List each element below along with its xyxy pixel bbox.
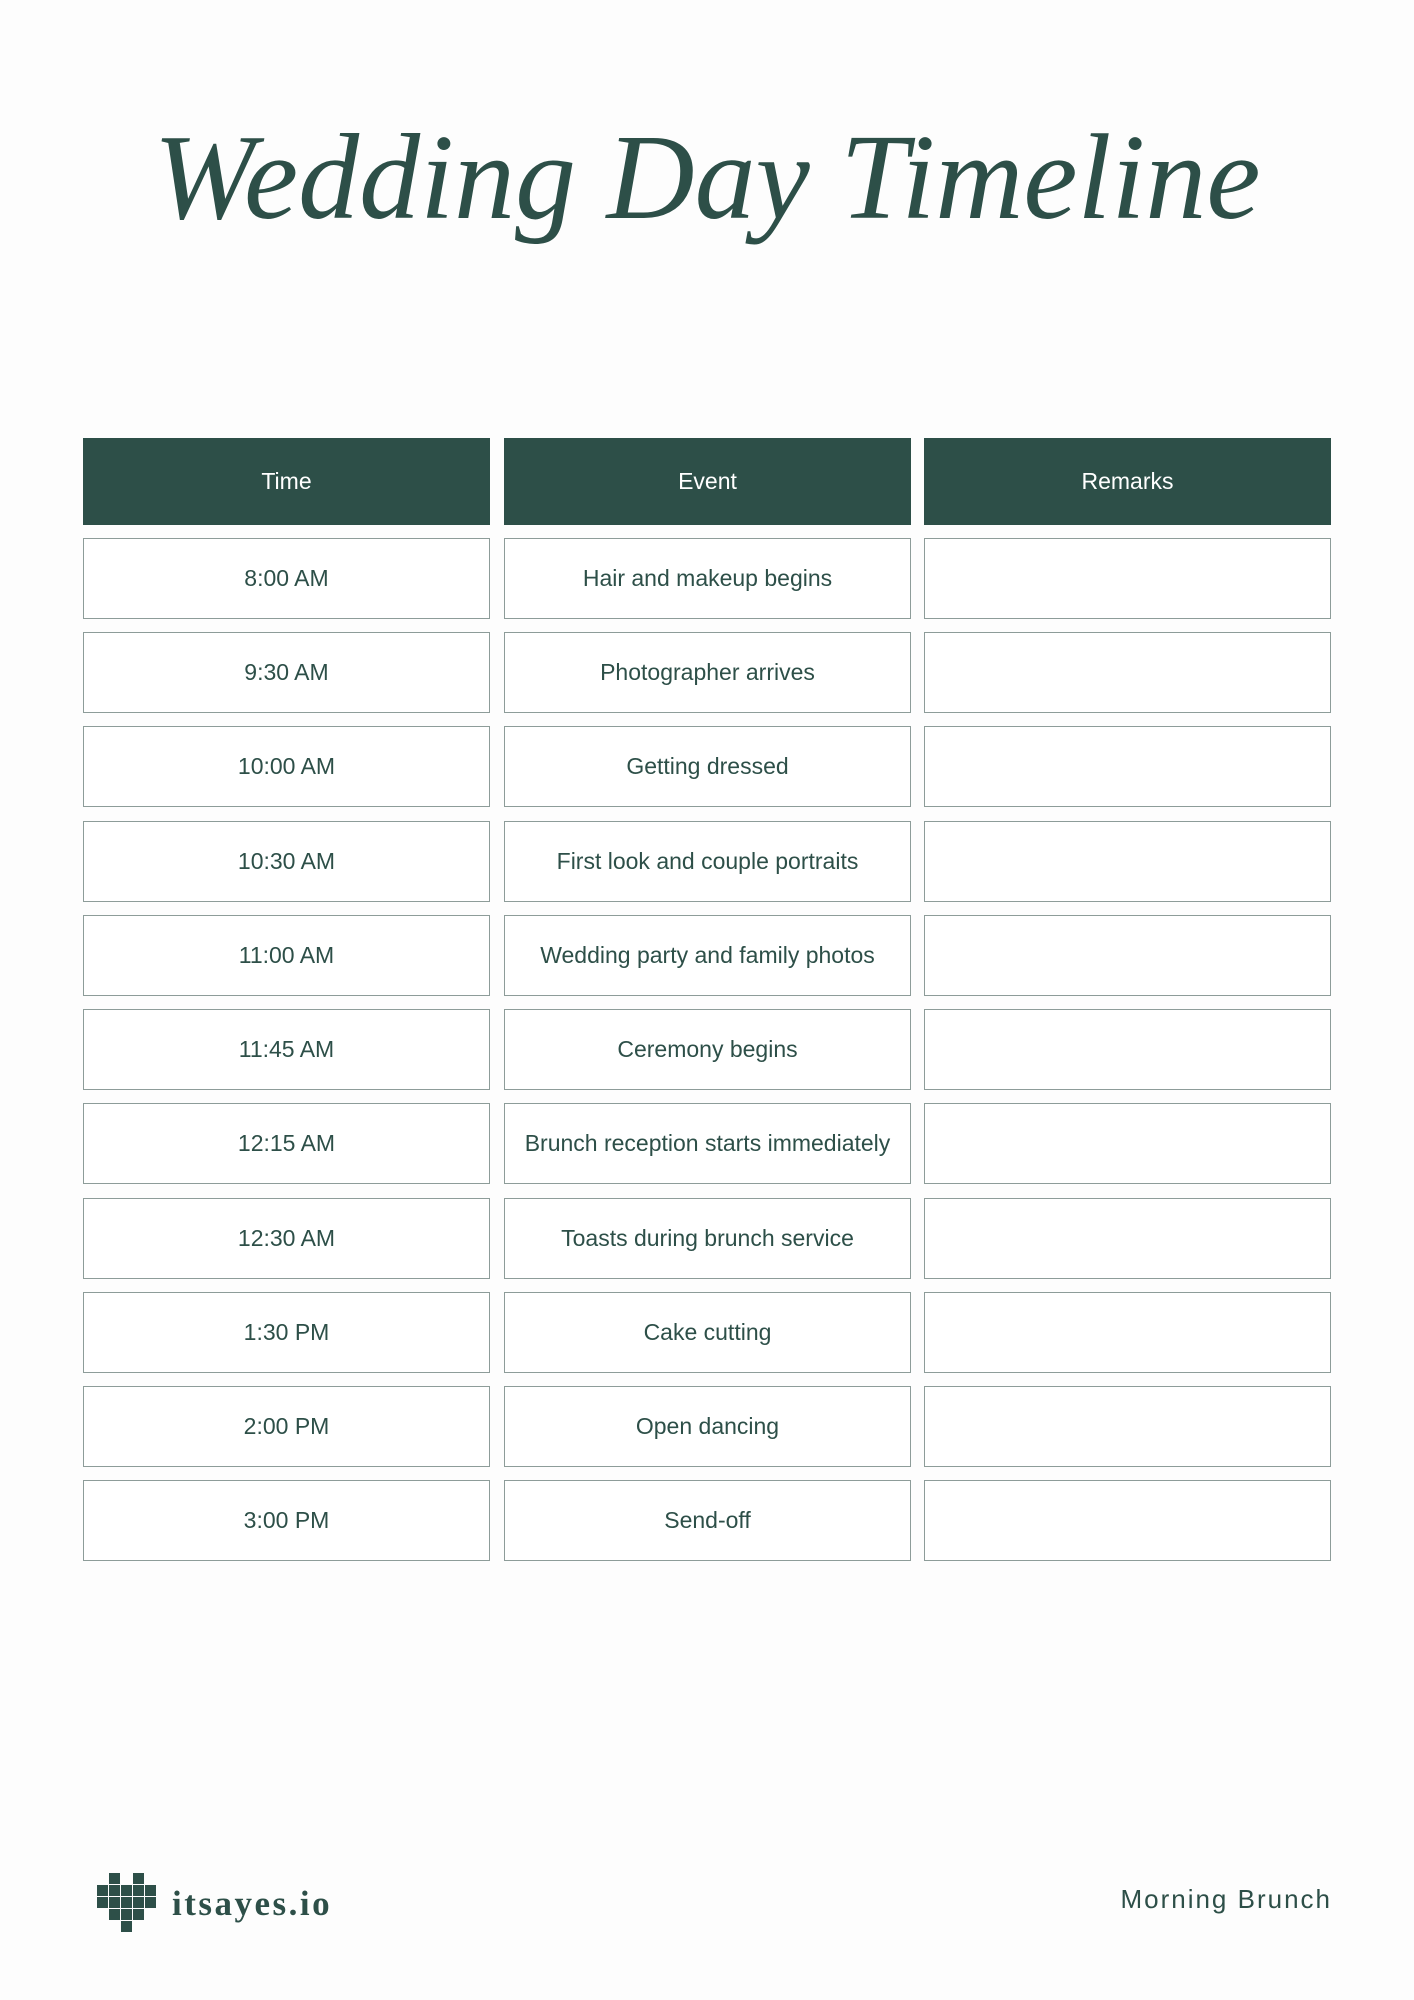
logo: [97, 1873, 332, 1932]
row 1: 8:00 AM: [244, 565, 329, 591]
row 1: [83, 538, 1331, 619]
row 8: [83, 1198, 1331, 1279]
icon: pixel heart: [97, 1873, 156, 1932]
header: Remarks: Remarks: [1081, 468, 1174, 494]
row 3: Getting dressed: [626, 753, 789, 779]
row 4: [83, 821, 1331, 902]
logo text: itsayes.io: [172, 1884, 332, 1923]
row 10: Open dancing: [636, 1413, 779, 1439]
header: Event: [504, 438, 911, 525]
row 5: 11:00 AM: [239, 942, 334, 968]
row 7: [83, 1103, 1331, 1184]
footer label: Morning Brunch: [1120, 1884, 1332, 1914]
row 9: [83, 1292, 1331, 1373]
row 3: [83, 726, 1331, 807]
row 4: First look and couple portraits: [557, 848, 858, 874]
header: Time: Time: [261, 468, 312, 494]
row 8: 12:30 AM: [238, 1225, 335, 1251]
row 7: Brunch reception starts immediately: [525, 1130, 890, 1156]
row 6: 11:45 AM: [239, 1036, 334, 1062]
header: Event: Event: [678, 468, 737, 494]
title: Wedding Day Timeline: [154, 110, 1260, 245]
row 9: Cake cutting: [644, 1319, 771, 1345]
row 2: 9:30 AM: [244, 659, 329, 685]
row 1: Hair and makeup begins: [583, 565, 832, 591]
row 2: Photographer arrives: [600, 659, 815, 685]
row 9: 1:30 PM: [244, 1319, 329, 1345]
row 11: 3:00 PM: [244, 1507, 329, 1533]
row 11: [83, 1480, 1331, 1561]
row 5: [83, 915, 1331, 996]
row 11: Send-off: [664, 1507, 751, 1533]
row 5: Wedding party and family photos: [540, 942, 875, 968]
row 6: Ceremony begins: [617, 1036, 798, 1062]
row 7: 12:15 AM: [238, 1130, 335, 1156]
row 3: 10:00 AM: [238, 753, 335, 779]
row 10: 2:00 PM: [244, 1413, 329, 1439]
row 4: 10:30 AM: [238, 848, 335, 874]
row 2: [83, 632, 1331, 713]
header: Remarks: [924, 438, 1331, 525]
header: Time: [83, 438, 490, 525]
table: timeline: [83, 438, 1331, 1561]
row 10: [83, 1386, 1331, 1467]
row 6: [83, 1009, 1331, 1090]
row 8: Toasts during brunch service: [561, 1225, 854, 1251]
